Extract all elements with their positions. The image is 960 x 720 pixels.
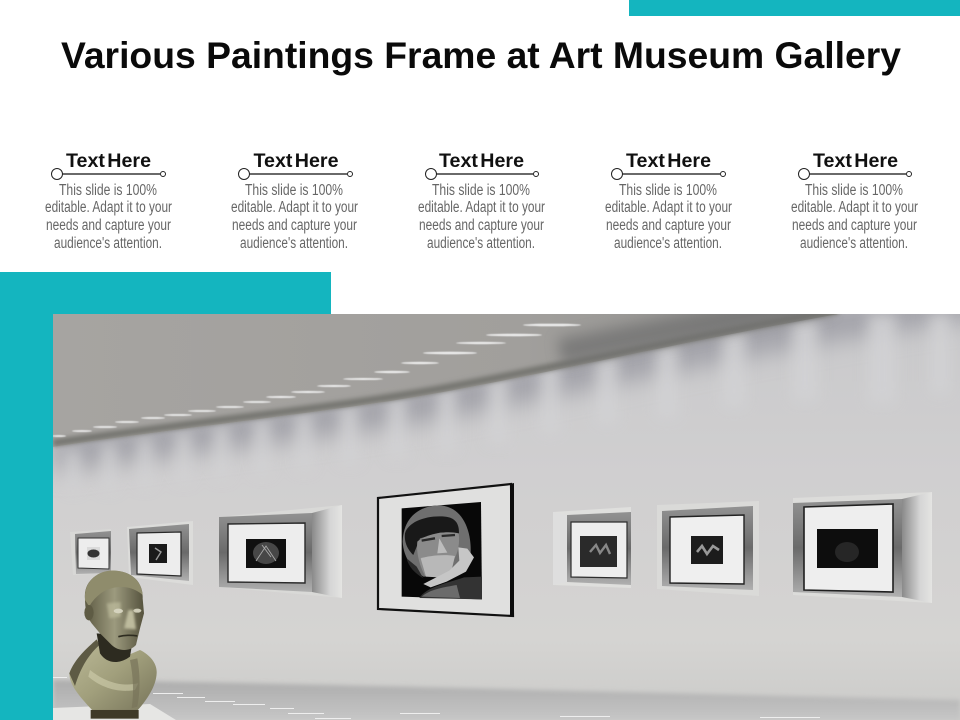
head bbox=[85, 571, 144, 650]
pedestal bbox=[53, 704, 176, 720]
text block: column 5 bbox=[791, 151, 918, 252]
gallery wall bbox=[53, 314, 960, 720]
text block: column 1: This slide is 100% bbox=[59, 182, 157, 199]
niche 1 with small framed picture bbox=[75, 531, 111, 574]
text block: column 1: editable. Adapt it to your bbox=[45, 199, 172, 216]
text block: column 3: Text Here bbox=[439, 151, 524, 172]
coat bbox=[419, 577, 482, 599]
niche 4 with framed picture bbox=[553, 507, 631, 588]
text block: column 4: audience's attention. bbox=[614, 235, 722, 252]
wall wash lights below the ceiling bbox=[53, 314, 960, 478]
text block: column 4: Text Here bbox=[626, 151, 711, 172]
text block: column 4: This slide is 100% bbox=[619, 182, 717, 199]
text block: column 3: editable. Adapt it to your bbox=[418, 199, 545, 216]
text block: column 3 bbox=[418, 151, 545, 252]
text block: column 5: editable. Adapt it to your bbox=[791, 199, 918, 216]
text block: column 1: Text Here bbox=[66, 151, 151, 172]
text block: column 2: needs and capture your bbox=[232, 217, 357, 234]
floor light streaks bbox=[53, 677, 820, 719]
text block: column 4 bbox=[605, 151, 732, 252]
text block: column 5: This slide is 100% bbox=[805, 182, 903, 199]
text block: column 4: needs and capture your bbox=[606, 217, 731, 234]
ceiling bbox=[53, 314, 839, 447]
title: Various Paintings Frame at Art Museum Gallery bbox=[61, 34, 901, 76]
ceiling lights bbox=[52, 324, 581, 437]
facial highlights bbox=[107, 602, 121, 618]
text block: column 1: audience's attention. bbox=[54, 235, 162, 252]
hood bbox=[403, 505, 471, 577]
ear bbox=[84, 605, 94, 620]
text block: column 3: audience's attention. bbox=[427, 235, 535, 252]
niche 6 with framed picture bbox=[793, 492, 932, 603]
text block: column 5: needs and capture your bbox=[792, 217, 917, 234]
large framed portrait bbox=[377, 483, 514, 617]
beard bbox=[421, 555, 455, 577]
bronze bust bbox=[69, 571, 157, 719]
floor bbox=[53, 680, 960, 720]
text block: column 2 bbox=[231, 151, 358, 252]
hand bbox=[423, 547, 474, 587]
gallery photo bbox=[52, 300, 960, 720]
text block: column 1: needs and capture your bbox=[46, 217, 171, 234]
text block: column 5: Text Here bbox=[813, 151, 898, 172]
niche 3 with framed picture bbox=[219, 505, 342, 598]
text block: column 5: audience's attention. bbox=[800, 235, 908, 252]
hair bbox=[85, 571, 143, 607]
niche 5 with framed picture bbox=[657, 501, 759, 596]
text block: column 2: audience's attention. bbox=[240, 235, 348, 252]
text block: column 1 bbox=[45, 151, 172, 252]
text block: column 3: This slide is 100% bbox=[432, 182, 530, 199]
neck bbox=[97, 633, 133, 662]
ceiling edge shading bbox=[53, 310, 839, 443]
bust shoulders and robe bbox=[69, 640, 157, 711]
teal accent block: left bbox=[0, 272, 331, 720]
text block: column 4: editable. Adapt it to your bbox=[605, 199, 732, 216]
text block: column 3: needs and capture your bbox=[419, 217, 544, 234]
knit cap bbox=[405, 516, 459, 555]
teal accent bar: top right bbox=[629, 0, 960, 16]
bust base bbox=[91, 710, 139, 719]
portrait image bbox=[402, 502, 482, 599]
text block: column 2: Text Here bbox=[254, 151, 338, 172]
text block: column 2: This slide is 100% bbox=[245, 182, 343, 199]
text block: column 2: editable. Adapt it to your bbox=[231, 199, 358, 216]
niche 2 with small framed picture bbox=[127, 521, 193, 585]
face bbox=[417, 532, 459, 577]
